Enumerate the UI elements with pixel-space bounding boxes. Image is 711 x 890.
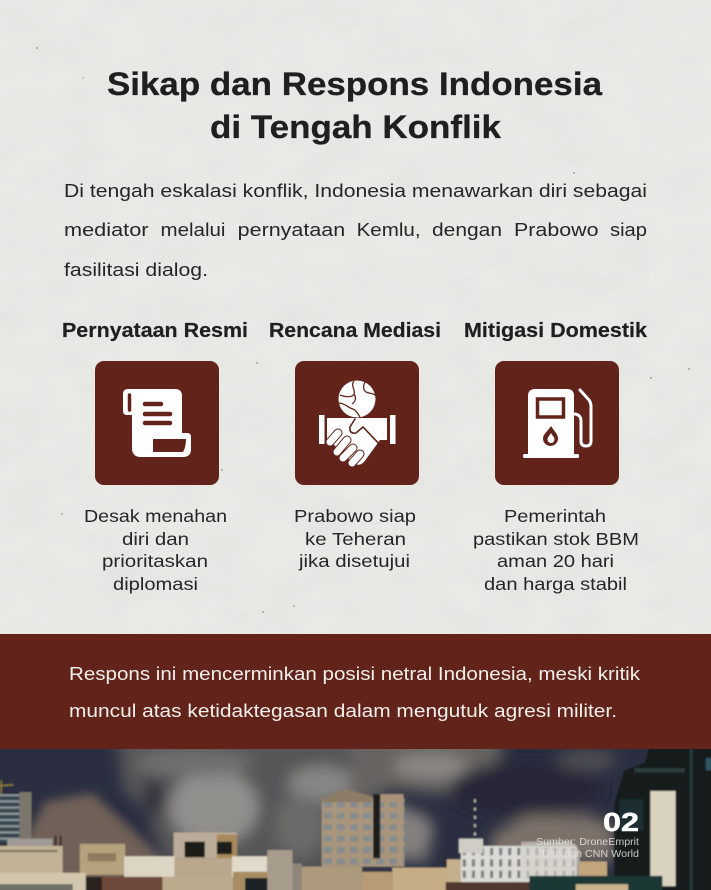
teal roof <box>529 876 662 890</box>
caption: Rencana Mediasi: ke Teheran <box>305 529 406 549</box>
mountain <box>27 793 163 887</box>
source credit: Tirto dan CNN World <box>540 848 639 860</box>
caption: Pernyataan Resmi: Desak menahan <box>84 506 227 526</box>
intro paragraph <box>64 181 647 280</box>
left glass tower <box>0 781 31 843</box>
column: Mitigasi Domestik <box>464 320 648 594</box>
intro paragraph: melalui <box>160 220 226 240</box>
icon: globe and handshake <box>295 361 419 485</box>
caption: Rencana Mediasi <box>294 506 416 571</box>
heading: Rencana Mediasi: Rencana Mediasi <box>269 320 441 342</box>
caption: Pernyataan Resmi: diplomasi <box>113 574 198 594</box>
intro paragraph: fasilitasi dialog. <box>64 260 208 280</box>
intro paragraph: dengan <box>432 220 502 240</box>
icon: document scroll <box>95 361 219 485</box>
caption: Rencana Mediasi: Prabowo siap <box>294 506 416 526</box>
central tan apartment tower <box>322 789 404 867</box>
intro paragraph: Prabowo <box>514 220 598 240</box>
paper background <box>0 0 711 634</box>
column: Pernyataan Resmi <box>62 320 248 594</box>
caption: Mitigasi Domestik <box>473 506 639 594</box>
sky <box>0 749 650 890</box>
intro paragraph: Di tengah eskalasi konflik, Indonesia menawarkan diri sebagai <box>64 181 647 201</box>
foreground buildings centre <box>302 859 531 890</box>
page number: 02 <box>603 807 639 837</box>
title: Sikap dan Respons Indonesia <box>107 66 603 102</box>
source credit: Sumber: DroneEmprit <box>536 836 639 848</box>
intro paragraph: mediator <box>64 220 149 240</box>
caption: Rencana Mediasi: jika disetujui <box>298 551 410 571</box>
caption: Pernyataan Resmi: diri dan <box>122 529 189 549</box>
title <box>107 66 603 145</box>
caption: Mitigasi Domestik: dan harga stabil <box>484 574 627 594</box>
caption: Mitigasi Domestik: Pemerintah <box>504 506 606 526</box>
intro paragraph: Kemlu, <box>357 220 421 240</box>
column: Rencana Mediasi <box>269 320 441 571</box>
heading: Pernyataan Resmi: Pernyataan Resmi <box>62 320 248 342</box>
banner: conclusion <box>0 634 711 749</box>
caption: Pernyataan Resmi <box>84 506 227 594</box>
white buildings <box>459 839 607 882</box>
dark glass tower <box>614 737 711 890</box>
source credit <box>536 836 639 860</box>
caption: Mitigasi Domestik: pastikan stok BBM <box>473 529 639 549</box>
caption: Mitigasi Domestik: aman 20 hari <box>497 551 614 571</box>
photo: city skyline with smoke <box>0 749 711 890</box>
caption: Pernyataan Resmi: prioritaskan <box>102 551 208 571</box>
foreground buildings left <box>0 832 302 890</box>
intro paragraph: siap <box>610 220 647 240</box>
banner: conclusion: muncul atas ketidaktegasan dalam mengutuk agresi militer. <box>69 701 617 721</box>
smoke <box>113 749 617 870</box>
banner: conclusion: Respons ini mencerminkan posisi netral Indonesia, meski kritik <box>69 664 641 684</box>
icon: fuel pump <box>495 361 619 485</box>
intro paragraph: pernyataan <box>238 220 345 240</box>
title: di Tengah Konflik <box>210 109 502 145</box>
heading: Mitigasi Domestik: Mitigasi Domestik <box>464 320 648 342</box>
antenna <box>474 799 476 841</box>
